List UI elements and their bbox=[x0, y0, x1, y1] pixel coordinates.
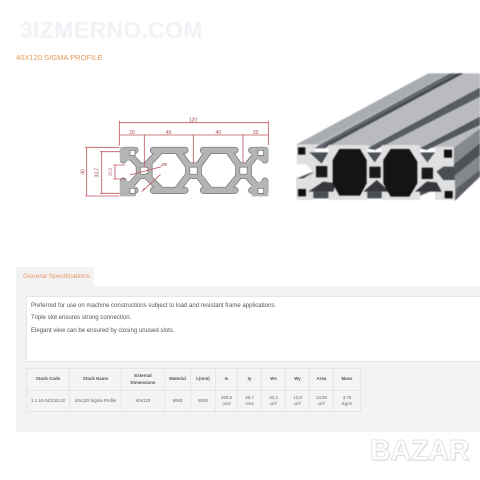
specifications table: Mass bbox=[342, 376, 352, 381]
specifications table: cm³ bbox=[270, 401, 277, 406]
specifications table: 12,8 bbox=[293, 395, 302, 400]
specifications table: Wy bbox=[294, 376, 301, 381]
specifications table: Dimensions bbox=[131, 380, 155, 384]
specifications table: 13,93 bbox=[316, 395, 327, 400]
dimension labels: 20 bbox=[253, 130, 259, 136]
specifications table: 33,4 bbox=[269, 395, 278, 400]
technical drawing: profile cross-section with dimensions bbox=[80, 117, 269, 196]
tabbed specifications panel bbox=[16, 286, 480, 432]
tab: General Specifications bbox=[16, 267, 94, 286]
dimension labels: 40 bbox=[80, 169, 86, 175]
specifications table: Area bbox=[317, 376, 326, 381]
dimension labels: 20 bbox=[129, 130, 135, 136]
specifications table: Ix bbox=[225, 376, 228, 381]
specifications table: Wx bbox=[270, 376, 277, 381]
dimension labels: Ø8 bbox=[161, 162, 168, 167]
dimension labels: 10,2 bbox=[108, 167, 113, 176]
specifications table: Stock Name bbox=[83, 376, 108, 381]
3D render of aluminium profile bbox=[296, 72, 480, 202]
dimension labels bbox=[80, 117, 259, 192]
specifications table: cm³ bbox=[294, 401, 301, 406]
specifications table: cm4 bbox=[245, 401, 254, 406]
right side face bbox=[453, 128, 480, 201]
specifications table: Kg/m bbox=[342, 401, 352, 406]
description text: Elegant view can be ensured by closing unused slots. bbox=[31, 328, 175, 334]
specifications table: Iy bbox=[248, 376, 251, 381]
specifications table: External bbox=[134, 373, 152, 378]
specifications table: Stock Code bbox=[36, 376, 60, 381]
description text: Preferred for use on machine constructions subject to load and resistant frame applications. bbox=[31, 303, 276, 309]
specifications table: 40x120 bbox=[136, 398, 150, 403]
tab: General Specifications: General Specifications bbox=[23, 273, 90, 280]
interior slots behind front face bbox=[297, 165, 455, 198]
description text: Triple slot ensures strong connection. bbox=[31, 315, 131, 321]
dimension labels: 120 bbox=[189, 117, 197, 123]
specifications table: 200,5 bbox=[221, 395, 232, 400]
description text bbox=[31, 302, 276, 334]
specifications table: 1.1.10.040120.02 bbox=[31, 398, 65, 403]
specifications table: L(mm) bbox=[196, 376, 210, 381]
profile cross-section bbox=[120, 147, 268, 196]
description box bbox=[26, 296, 480, 362]
dimension labels: 7 bbox=[143, 187, 146, 192]
dimension lines bbox=[85, 121, 268, 196]
front face bbox=[297, 144, 455, 200]
dimension labels: 33,7 bbox=[94, 168, 100, 178]
dimension labels: 40 bbox=[216, 130, 221, 136]
specifications table: 3,76 bbox=[343, 395, 351, 400]
specifications table: 6000 bbox=[198, 398, 208, 403]
title: 40X120 SIGMA PROFILE bbox=[16, 53, 102, 62]
specifications table: Material bbox=[169, 376, 186, 381]
top face bbox=[297, 73, 480, 150]
watermark: BAZAR logo: BAZAR bbox=[370, 435, 469, 467]
specifications table: cm² bbox=[318, 401, 325, 406]
specifications table: 25,7 bbox=[245, 395, 254, 400]
dimension labels: 40 bbox=[166, 130, 172, 136]
specifications table: 40x120 Sigma Profile bbox=[75, 398, 116, 403]
specifications table: cm4 bbox=[222, 401, 231, 406]
specifications table bbox=[26, 368, 361, 412]
watermark: site name: 3IZMERNO.COM bbox=[20, 17, 203, 43]
specifications table: 6063 bbox=[173, 398, 182, 403]
